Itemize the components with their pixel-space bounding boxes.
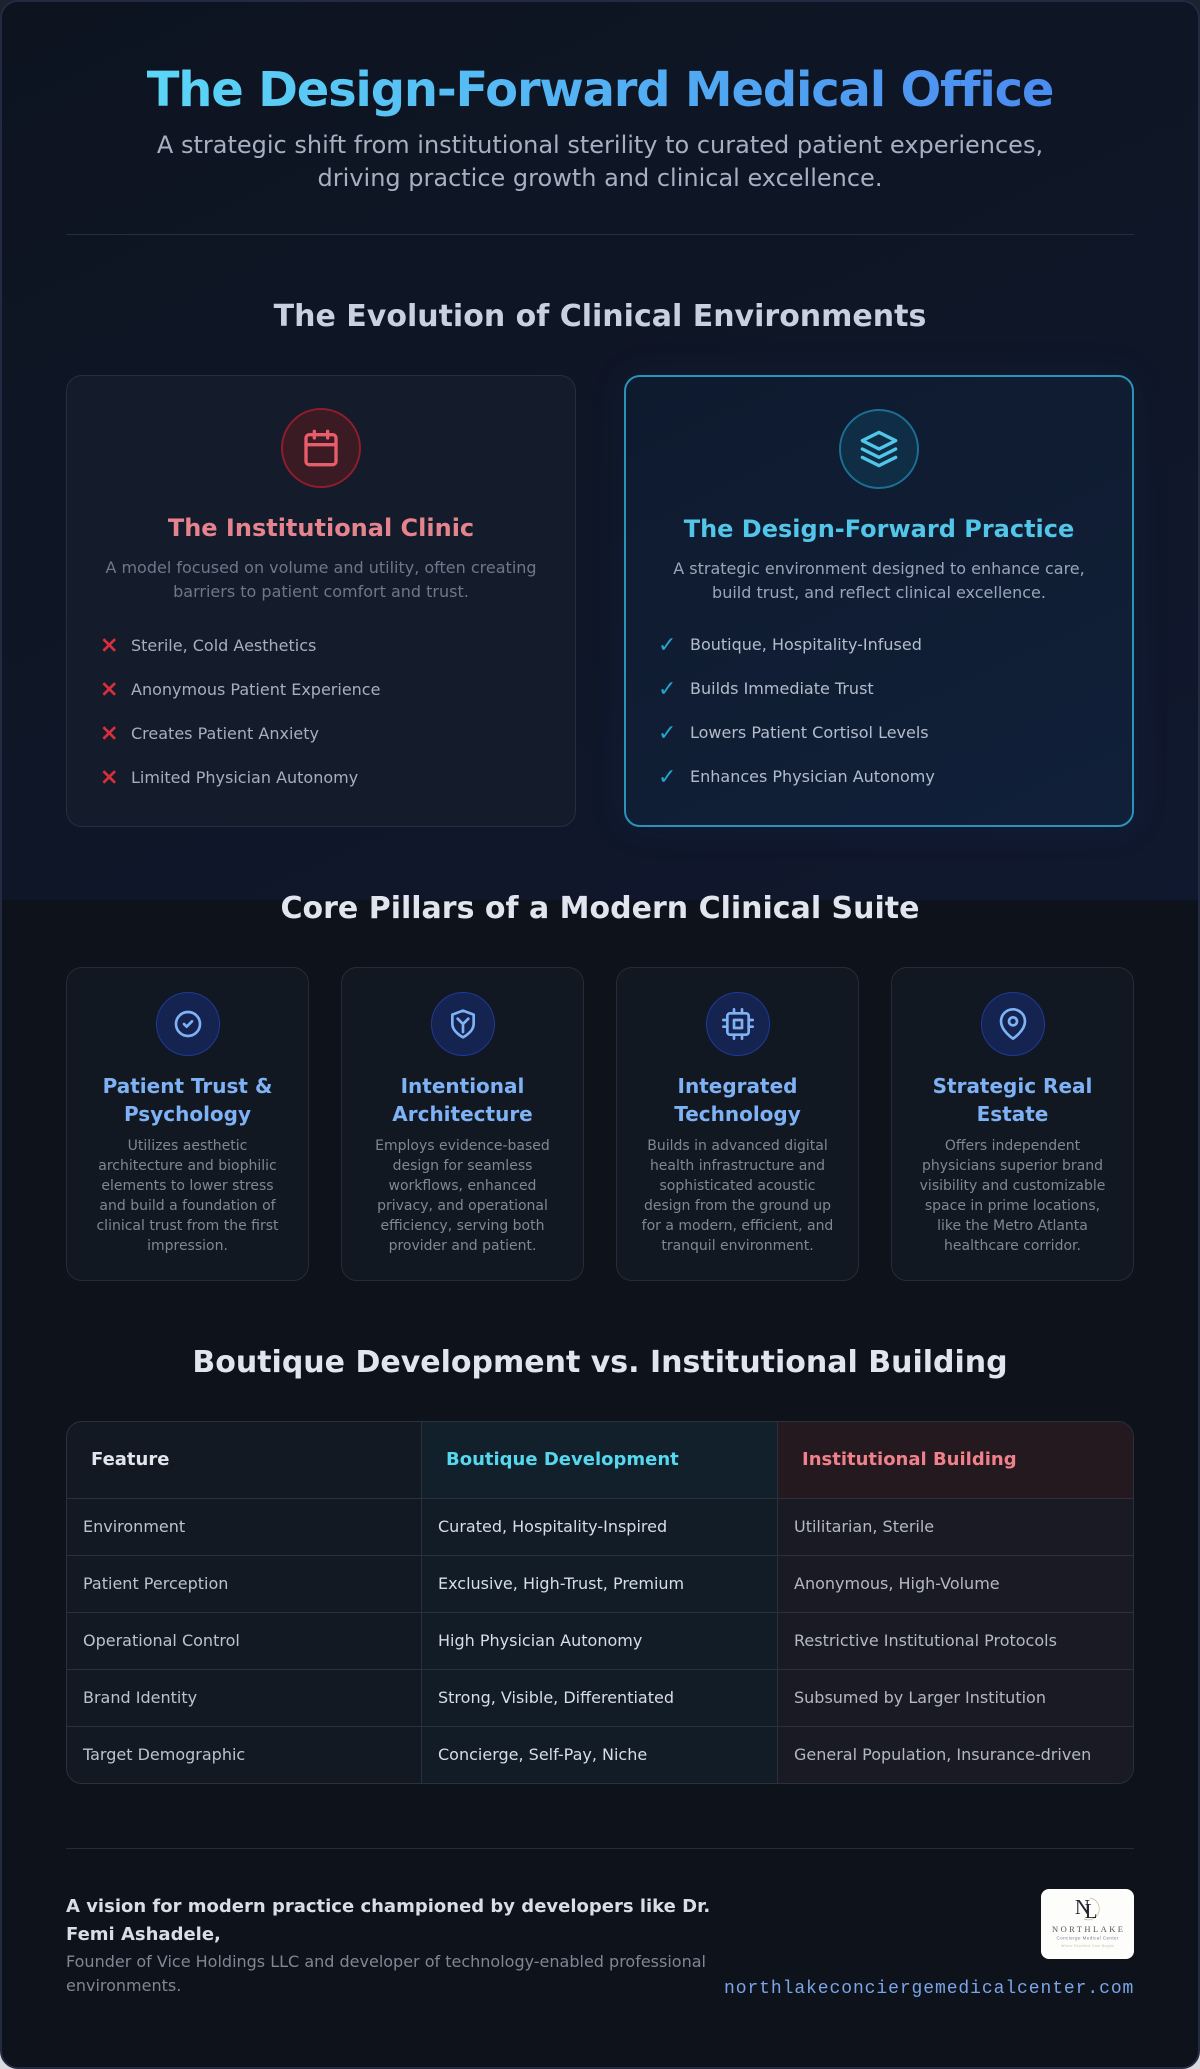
list: drawbacks: ✕ [100,634,118,659]
pillar title: Architecture [392,1102,533,1126]
pillar description: design from the ground up [644,1198,831,1214]
pillar description: health infrastructure and [650,1158,825,1174]
pillar description: sophisticated acoustic [660,1178,815,1194]
row: target demographic [82,1745,1091,1764]
pillar title: Estate [977,1102,1048,1126]
logo: Northlake: N [1075,1895,1090,1919]
list: drawbacks: ✕ [100,678,118,703]
pillar title: Patient Trust & [103,1074,272,1098]
pillar description: clinical trust from the first [96,1218,279,1234]
logo: Northlake: NORTHLAKE [1052,1924,1123,1934]
pillar description: privacy, and operational [377,1198,548,1214]
pillar title: Integrated [678,1074,797,1098]
comparison table [66,1421,1134,1784]
panel: integrated technology [616,967,859,1281]
table header: Institutional Building [802,1449,1017,1470]
list: benefits: ✓ [658,765,676,790]
pillar title [933,1074,1092,1126]
row: patient perception: Exclusive, High-Trust, Premium [438,1574,684,1593]
table header [91,1449,1017,1470]
list: benefits: Builds Immediate Trust [690,679,874,698]
column backgrounds [421,1422,777,1783]
pillar description: design for seamless [393,1158,532,1174]
panel: institutional clinic [66,375,576,827]
list: drawbacks: Limited Physician Autonomy [131,768,358,787]
footer: vision statement: Founder of Vice Holdings LLC and developer of technology-enabled professional [66,1952,706,1971]
card description [105,558,537,601]
row: operational control: Restrictive Institutional Protocols [794,1631,1057,1650]
list: drawbacks: Sterile, Cold Aesthetics [131,636,316,655]
pillar title [103,1074,272,1126]
icon: check circle [156,992,220,1056]
row: brand identity: Brand Identity [83,1688,197,1707]
heading: comparison: Boutique Development vs. Institutional Building [192,1345,1008,1380]
list: benefits: Boutique, Hospitality-Infused [690,635,922,654]
icon: calendar [281,408,361,488]
heading: core pillars: Core Pillars of a Modern Clinical Suite [280,891,919,926]
list: drawbacks: ✕ [100,766,118,791]
pillar description: efficiency, serving both [381,1218,544,1234]
pillar description [920,1138,1105,1254]
panel: intentional architecture [341,967,584,1281]
row: patient perception: Patient Perception [83,1574,228,1593]
logo: Northlake: Concierge Medical Center [1056,1936,1119,1940]
pillar description: and build a foundation of [99,1198,276,1214]
card description: A strategic environment designed to enhance care, [673,559,1085,578]
footer: vision statement: Femi Ashadele, [66,1924,221,1945]
row: patient perception: Anonymous, High-Volume [794,1574,1000,1593]
logo: Northlake: Where Excellent Care Begins [1061,1944,1114,1948]
list: benefits: ✓ [658,721,676,746]
row: operational control [83,1631,1057,1650]
pillar title: Psychology [124,1102,251,1126]
pillar description: architecture and biophilic [98,1158,277,1174]
pillar title: Intentional [401,1074,524,1098]
panel: design-forward practice [624,375,1134,827]
icon: layers [839,409,919,489]
pillar description [96,1138,279,1254]
row: target demographic: General Population, Insurance-driven [794,1745,1091,1764]
footer: website: northlakeconciergemedicalcenter.com [724,1979,1134,1999]
icon: map pin [980,992,1044,1056]
list: drawbacks [100,634,380,791]
row: brand identity: Subsumed by Larger Institution [794,1688,1046,1707]
card description: barriers to patient comfort and trust. [173,582,469,601]
row: operational control: Operational Control [83,1631,240,1650]
pillar description: workflows, enhanced [389,1178,536,1194]
pillar description [642,1138,833,1254]
pillar description: for a modern, efficient, and [642,1218,833,1234]
pillar description: Employs evidence-based [375,1138,550,1154]
table header: Feature [91,1449,169,1470]
row: environment: Environment [83,1517,185,1536]
card title: The Design-Forward Practice [684,515,1074,543]
pillar title: Technology [674,1102,801,1126]
row: brand identity [83,1688,1046,1707]
footer: vision statement: environments. [66,1976,181,1995]
subtitle: A strategic shift from institutional sterility to curated patient experiences, [157,131,1043,159]
card description: A model focused on volume and utility, often creating [105,558,537,577]
pillar title: Strategic Real [933,1074,1092,1098]
pillar title [392,1074,533,1126]
card description [673,559,1085,602]
row: environment [83,1517,934,1536]
logo: Northlake [1041,1889,1134,1959]
icon: chip [706,992,770,1056]
footer: vision statement [66,1896,710,1995]
list: benefits: Lowers Patient Cortisol Levels [690,723,929,742]
pillar description: space in prime locations, [925,1198,1100,1214]
row: patient perception [83,1574,1000,1593]
table header: Boutique Development [446,1449,679,1470]
pillar description: Offers independent [945,1138,1080,1154]
pillar description: Builds in advanced digital [647,1138,828,1154]
row: target demographic: Target Demographic [83,1745,245,1764]
pillar description: healthcare corridor. [944,1238,1081,1254]
list: drawbacks: Anonymous Patient Experience [131,680,380,699]
list: benefits: Enhances Physician Autonomy [690,767,935,786]
panel: patient trust [66,967,309,1281]
pillar description: like the Metro Atlanta [937,1218,1088,1234]
row: target demographic: Concierge, Self-Pay, Niche [438,1745,647,1764]
list: drawbacks: ✕ [100,722,118,747]
card description: build trust, and reflect clinical excellence. [712,583,1046,602]
pillar description: tranquil environment. [661,1238,814,1254]
heading: evolution: The Evolution of Clinical Environments [274,299,926,334]
row: environment: Curated, Hospitality-Inspired [438,1517,667,1536]
logo: Northlake: L [1085,1899,1097,1923]
card title: The Institutional Clinic [168,514,474,542]
pillar description [375,1138,550,1254]
pillar title [674,1074,801,1126]
footer: vision statement: A vision for modern practice championed by developers like Dr. [66,1896,710,1917]
list: benefits: ✓ [658,677,676,702]
list: drawbacks: Creates Patient Anxiety [131,724,319,743]
pillar description: visibility and customizable [920,1178,1105,1194]
title: The Design-Forward Medical Office [147,62,1053,118]
panel: strategic real estate [891,967,1134,1281]
pillar description: provider and patient. [389,1238,536,1254]
row: brand identity: Strong, Visible, Differentiated [438,1688,674,1707]
row: operational control: High Physician Autonomy [438,1631,642,1650]
list: benefits: ✓ [658,633,676,658]
pillar description: elements to lower stress [101,1178,274,1194]
pillar description: impression. [147,1238,228,1254]
pillar description: Utilizes aesthetic [128,1138,247,1154]
row: environment: Utilitarian, Sterile [794,1517,934,1536]
icon: shield [430,992,494,1056]
subtitle: driving practice growth and clinical excellence. [318,164,882,192]
subtitle [157,131,1043,192]
pillar description: physicians superior brand [922,1158,1103,1174]
list: benefits [658,633,935,790]
